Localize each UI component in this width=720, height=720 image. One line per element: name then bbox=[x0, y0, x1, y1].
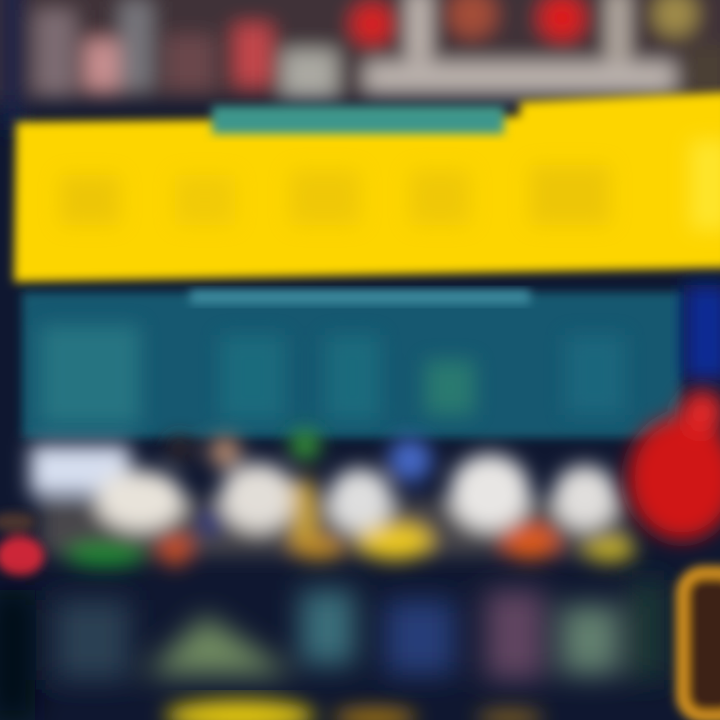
panel heading strip bbox=[190, 290, 530, 304]
bottom cards row bbox=[0, 580, 664, 720]
panel columns bbox=[40, 325, 625, 425]
bottom yellow strip bbox=[165, 700, 544, 720]
teal panel bbox=[22, 285, 720, 438]
right blue edge bbox=[684, 285, 720, 380]
yellow banner bbox=[14, 92, 720, 282]
red apple bbox=[628, 390, 720, 540]
left red fruit bbox=[0, 512, 44, 576]
teal heading ribbon bbox=[212, 106, 504, 134]
gold framed card bbox=[682, 572, 720, 717]
banner texture bbox=[60, 140, 720, 230]
balls row bbox=[30, 430, 636, 567]
top photo strip bbox=[0, 0, 720, 130]
